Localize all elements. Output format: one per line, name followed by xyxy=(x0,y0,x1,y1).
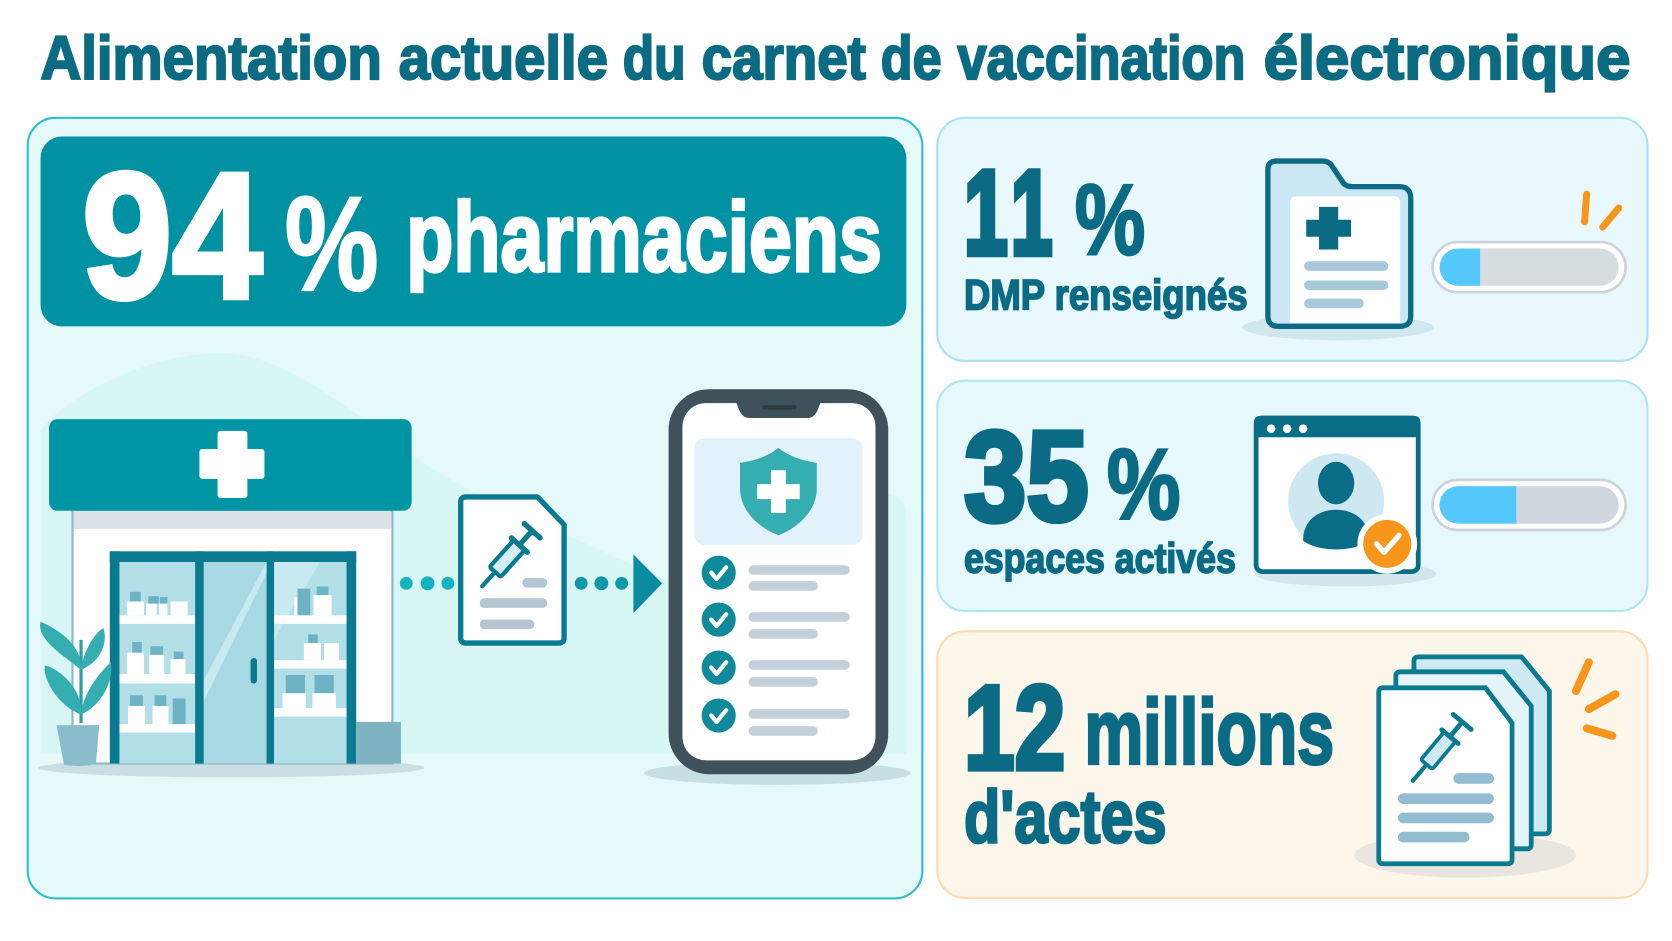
icon: vaccine document xyxy=(461,497,564,643)
banner xyxy=(41,136,906,336)
panel: espaces activés xyxy=(937,381,1647,611)
title xyxy=(41,24,1630,92)
percent sign: % xyxy=(285,169,379,319)
stat 35 % xyxy=(964,405,1180,548)
shelves xyxy=(119,595,347,733)
stat 12 millions: millions xyxy=(1084,682,1334,784)
stat 12 millions: 12 xyxy=(964,662,1065,795)
icon: user account window xyxy=(1254,416,1436,587)
icon: medical folder xyxy=(1242,161,1434,340)
label DMP renseignés: DMP renseignés xyxy=(964,271,1248,319)
icon: shield with cross xyxy=(740,448,817,535)
icon: white cross xyxy=(199,431,264,498)
word pharmaciens: pharmaciens xyxy=(406,182,882,292)
progress bar 11 % xyxy=(1433,242,1626,292)
title: vaccination xyxy=(958,24,1245,92)
title: carnet xyxy=(702,24,866,92)
title: Alimentation xyxy=(41,24,382,92)
progress bar 35 % xyxy=(1433,480,1626,530)
stat 11 %: % xyxy=(1075,164,1145,276)
panel: pharmaciens xyxy=(28,118,922,898)
icon: potted plant xyxy=(40,622,111,766)
title: de xyxy=(881,24,942,92)
background hills xyxy=(41,353,906,754)
title: du xyxy=(623,24,686,92)
stat 35 %: 35 xyxy=(964,405,1089,548)
label espaces activés: espaces activés xyxy=(964,535,1236,582)
stat 11 %: 1 xyxy=(964,147,1008,280)
icon: orange sparks xyxy=(1576,662,1615,736)
panel: 12 millions d'actes xyxy=(937,631,1647,898)
stat 12 millions xyxy=(964,662,1334,795)
stat 35 %: % xyxy=(1107,428,1180,540)
phone with vaccination record xyxy=(644,389,911,785)
stat 11 % xyxy=(964,147,1145,280)
checklist xyxy=(702,556,850,736)
label d'actes: d'actes xyxy=(964,774,1167,858)
shop sign xyxy=(49,419,412,511)
stat 11 %: 1 xyxy=(1011,147,1052,280)
icon: syringe xyxy=(1404,714,1471,788)
icon: stack of vaccine documents xyxy=(1354,657,1576,878)
title: actuelle xyxy=(399,24,608,92)
panel: DMP renseignés xyxy=(937,118,1647,361)
icon: orange sparks xyxy=(1585,194,1619,227)
icon: orange check badge xyxy=(1357,514,1417,574)
dotted arrow: shop to document xyxy=(400,576,454,590)
door frame xyxy=(110,551,356,764)
dotted arrow: document to phone xyxy=(575,555,662,613)
icon: syringe xyxy=(474,524,540,593)
pharmacy shop illustration xyxy=(38,419,424,777)
big number 94: 94 xyxy=(82,136,262,336)
title: électronique xyxy=(1264,24,1630,92)
